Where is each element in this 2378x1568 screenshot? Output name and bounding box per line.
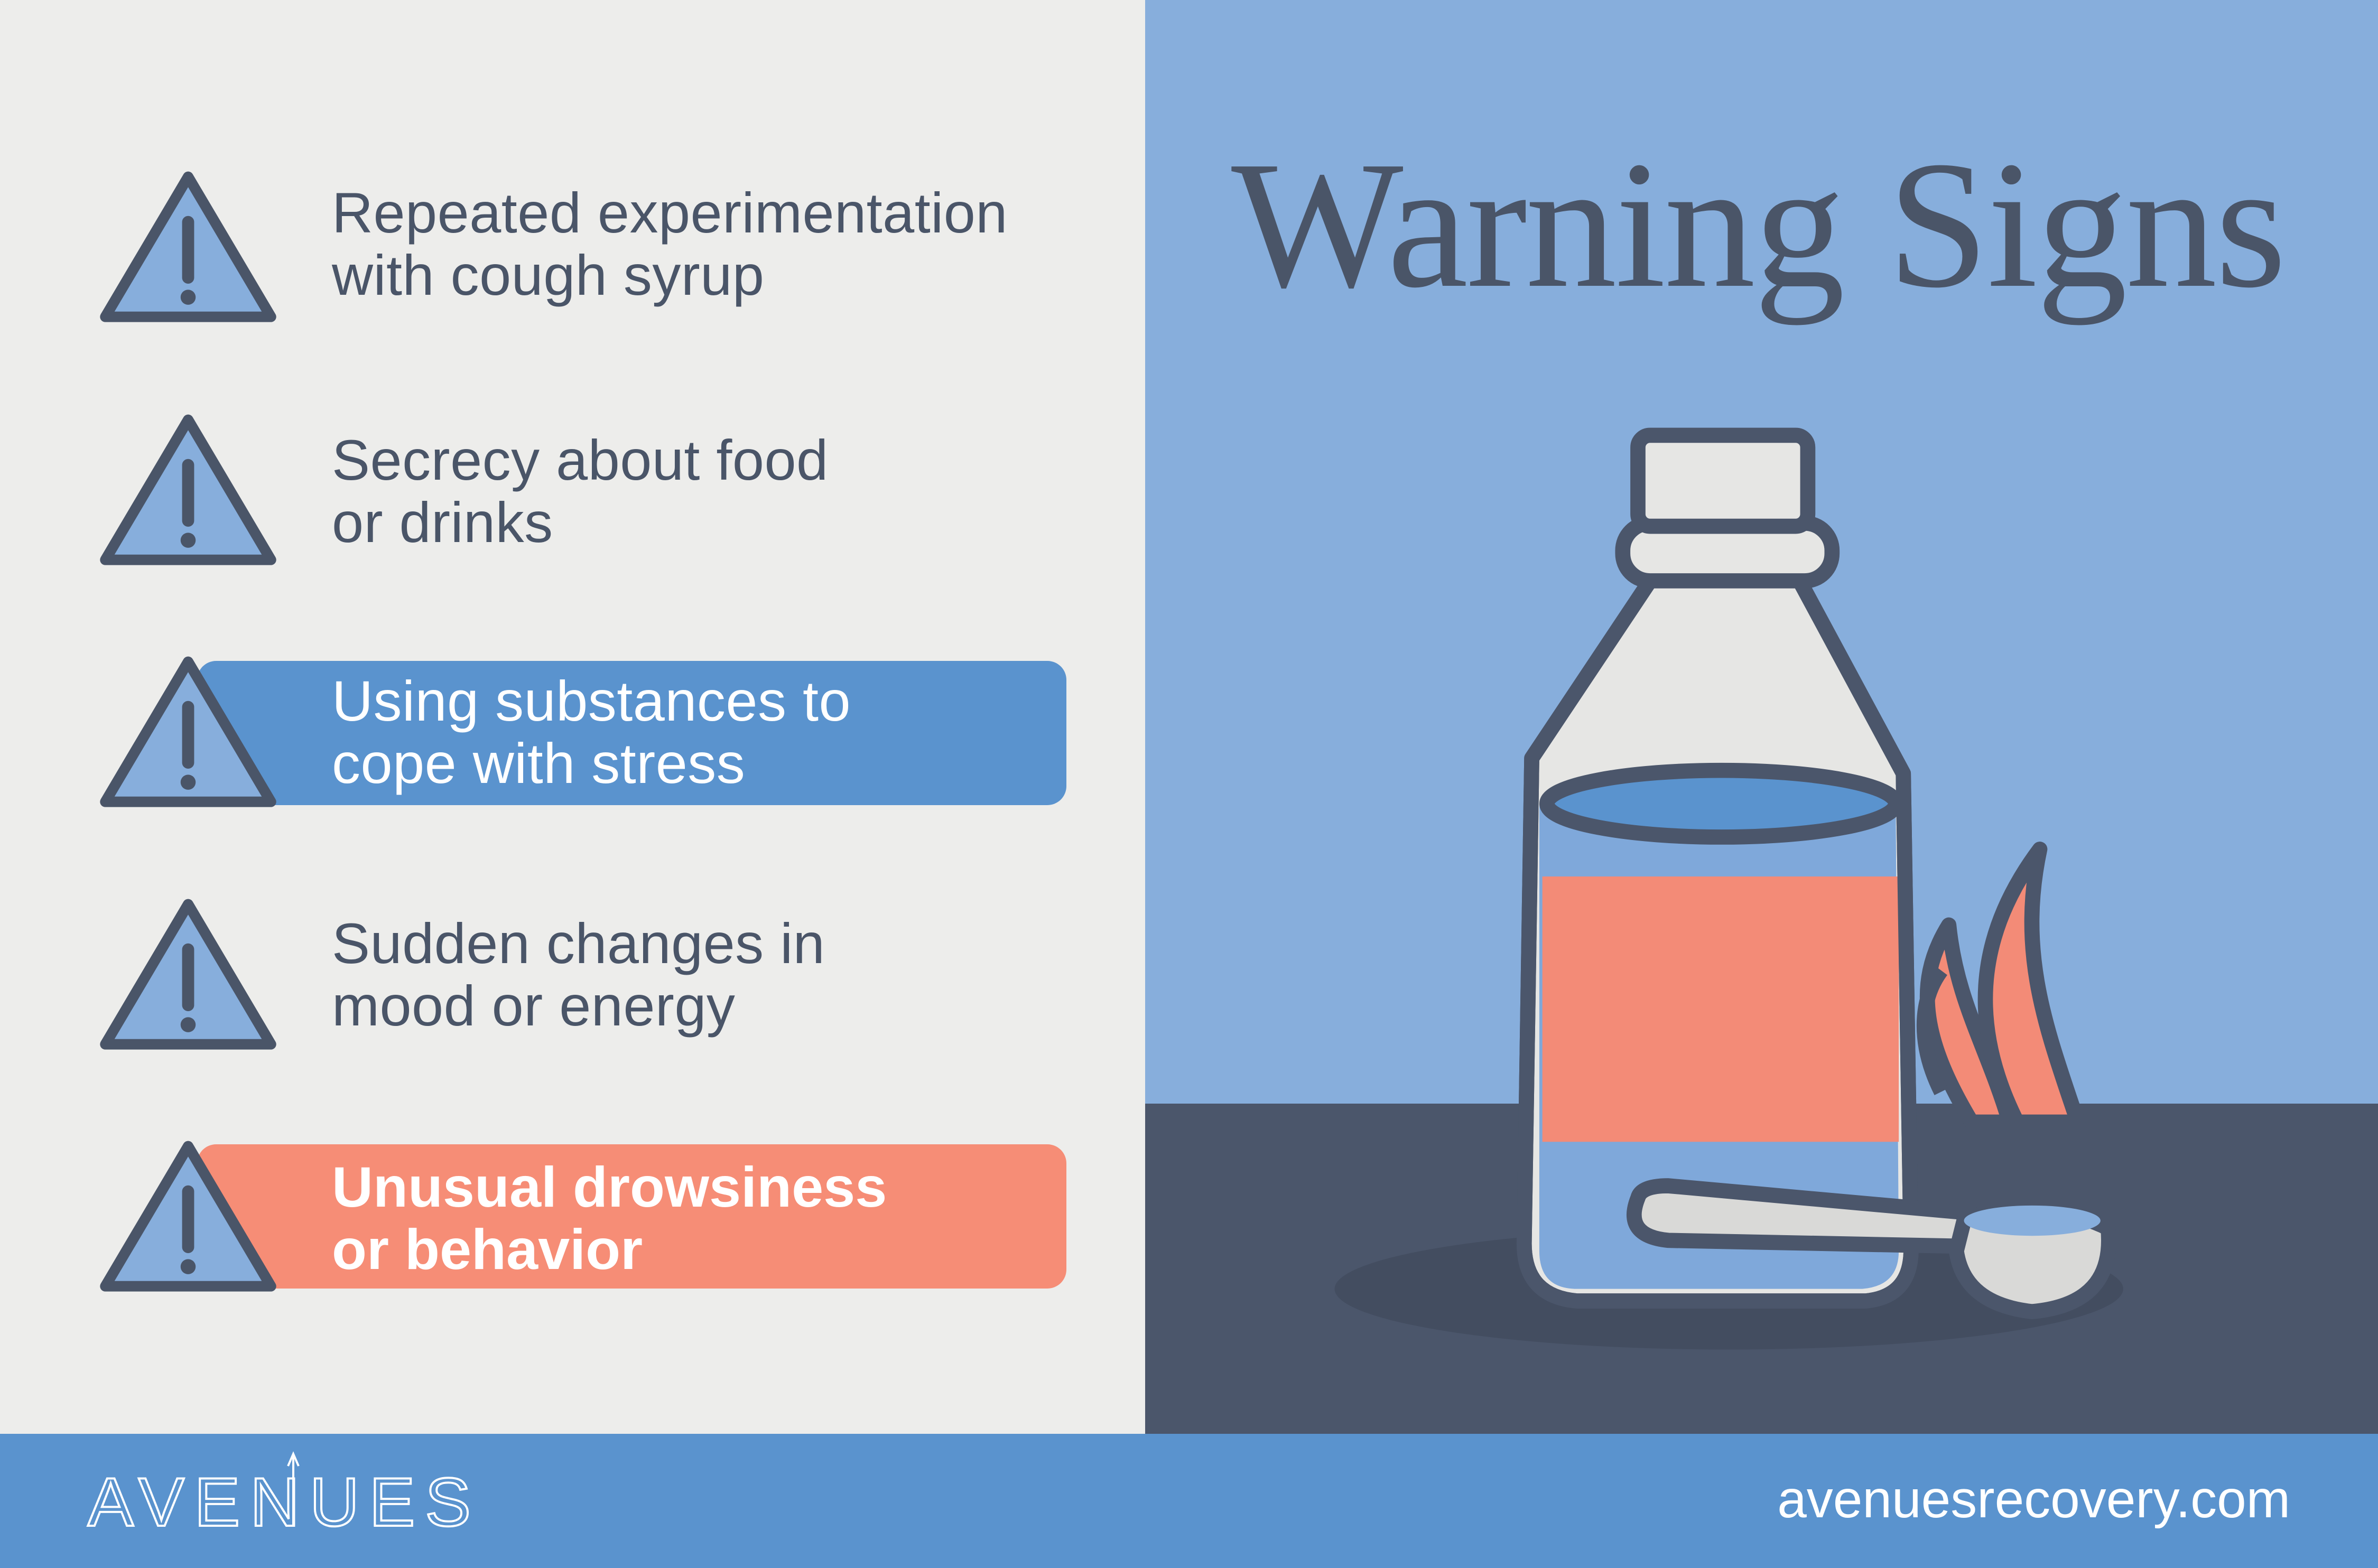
warning icon 3 bbox=[100, 656, 276, 807]
warning icon 1 bbox=[100, 171, 276, 322]
item 5 text: or behavior bbox=[332, 1217, 643, 1281]
warning icon 4 bbox=[100, 899, 276, 1050]
item 1 text bbox=[332, 181, 1008, 307]
cap bbox=[1638, 435, 1808, 526]
title: Warning Signs bbox=[1231, 124, 2285, 325]
table surface bbox=[1145, 1104, 2378, 1434]
item 1 text: Repeated experimentation bbox=[332, 181, 1008, 245]
body bbox=[1524, 576, 1911, 1301]
item 5 text bbox=[332, 1155, 887, 1281]
item 1 text: with cough syrup bbox=[332, 243, 764, 307]
item 2 text bbox=[332, 428, 829, 554]
item 4 text: Sudden changes in bbox=[332, 911, 825, 975]
left panel bbox=[0, 0, 1145, 1434]
spoon bbox=[1634, 1186, 1972, 1246]
highlight bar: stress bbox=[197, 661, 1066, 805]
warning icon 2 bbox=[100, 414, 276, 565]
warning icon 5 bbox=[100, 1141, 276, 1292]
item 5 text: Unusual drowsiness bbox=[332, 1155, 887, 1219]
highlight bar: drowsiness bbox=[197, 1144, 1066, 1289]
item 3 text: cope with stress bbox=[332, 731, 745, 795]
item 4 text bbox=[332, 911, 825, 1038]
website url: avenuesrecovery.com bbox=[1777, 1470, 2290, 1529]
item 4 text: mood or energy bbox=[332, 974, 735, 1038]
collar bbox=[1623, 523, 1832, 581]
footer bbox=[0, 1434, 2378, 1568]
item 3 text: Using substances to bbox=[332, 669, 851, 733]
right panel bbox=[1145, 0, 2378, 1434]
item 2 text: or drinks bbox=[332, 490, 553, 554]
steam bbox=[1927, 925, 2010, 1122]
item 3 text bbox=[332, 669, 851, 795]
item 2 text: Secrecy about food bbox=[332, 428, 829, 492]
